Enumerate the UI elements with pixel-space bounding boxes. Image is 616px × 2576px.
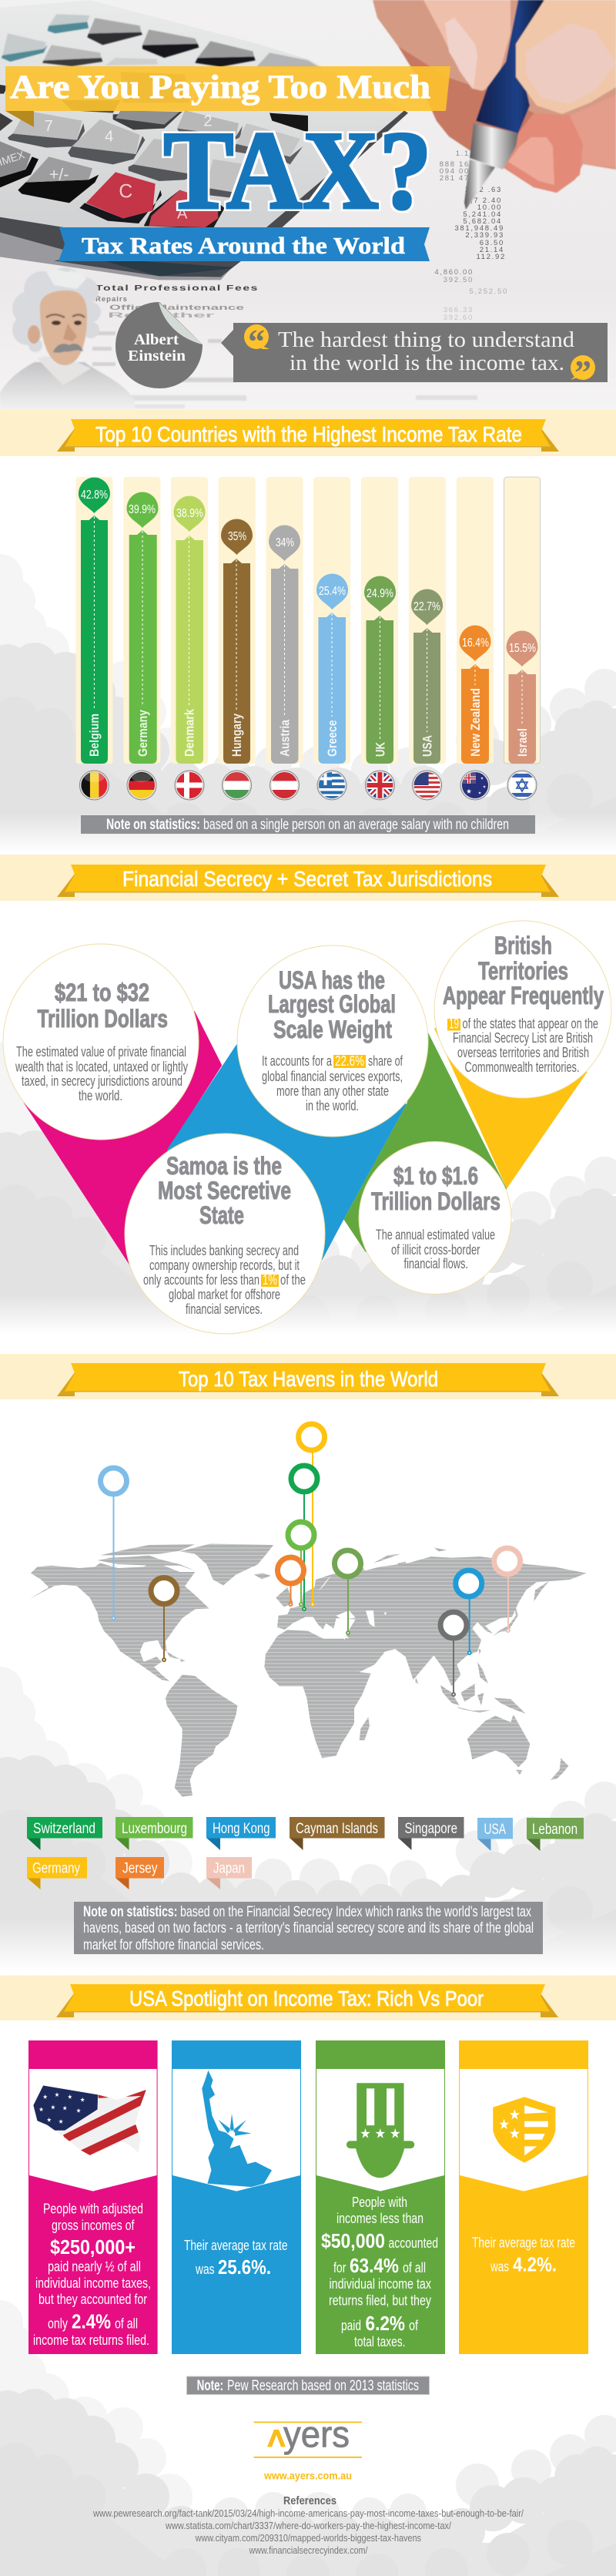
calculator key legends: +/- — [49, 165, 69, 183]
bar: Austria 34%: 34% — [276, 536, 294, 549]
bar: Hungary 35% — [219, 477, 256, 764]
logo: Ayers — [254, 2415, 362, 2458]
panel: British territories: British — [494, 932, 552, 959]
background clouds: footer section — [0, 2300, 616, 2576]
references: www.pewresearch.org/fact-tank/2015/03/24/high-income-americans-pay-most-income-taxes-but-enough-to-be-fair/ — [92, 2508, 524, 2519]
icon: closing quote — [571, 354, 595, 391]
tag: Japan: Japan — [213, 1860, 245, 1877]
paper figures: 392.60 — [444, 314, 474, 322]
panel: high income average tax rate: Their average tax rate — [184, 2238, 288, 2253]
panel: $21 to $32 trillion: Trillion Dollars — [37, 1005, 168, 1033]
bar: Denmark 38.9%: 38.9% — [176, 507, 203, 520]
panel: USA largest global scale weight: share of — [368, 1053, 403, 1069]
tag: Germany: Germany — [32, 1860, 80, 1877]
bar: Belgium 42.8%: 42.8% — [81, 489, 108, 502]
panel: USA largest global scale weight: more than any other state — [276, 1083, 389, 1099]
tag: Luxembourg — [116, 1817, 192, 1850]
panel: low income average tax rate: was — [490, 2259, 509, 2275]
quote box: The hardest thing to understand — [278, 327, 575, 352]
bar: New Zealand 16.4%: 16.4% — [462, 636, 489, 650]
bar: USA 22.7% — [409, 477, 446, 764]
paper figures: 21.14 — [480, 246, 504, 254]
panel: high income people: of all — [115, 2316, 138, 2332]
panel: high income people: People with adjusted — [43, 2201, 143, 2216]
section band: tax havens — [0, 1354, 616, 1399]
bar: USA 22.7%: 22.7% — [413, 600, 440, 613]
panel: Samoa most secretive state: 1% — [263, 1272, 277, 1288]
bar: New Zealand 16.4% — [457, 477, 494, 764]
references: References — [283, 2494, 336, 2507]
panel: Samoa most secretive state: only accounts for less than — [143, 1272, 259, 1288]
subtitle ribbon: Tax Rates Around the World — [82, 232, 405, 259]
coloured connectors — [24, 1011, 588, 1271]
pin: Switzerland — [291, 1466, 317, 1610]
section band: top 10 countries — [0, 410, 616, 456]
paper figures — [85, 149, 508, 408]
map: Africa, Eurasia and Oceania — [254, 1545, 587, 1780]
bar: Israel 15.5%: 15.5% — [509, 642, 536, 655]
map: Americas and Greenland — [29, 1543, 293, 1797]
panel: low income people: of all — [403, 2260, 426, 2275]
tag: USA: USA — [484, 1822, 506, 1838]
bar: Israel 15.5% — [504, 477, 541, 764]
tag: Singapore — [398, 1817, 464, 1850]
pin: Cayman Islands — [151, 1578, 177, 1661]
paper figures: 1.1 — [456, 149, 470, 158]
bar: Israel 15.5%: Israel — [516, 728, 530, 757]
bar: Greece 25.4%: 25.4% — [319, 585, 346, 598]
pin: Singapore — [440, 1612, 467, 1696]
calculator key legends: 7 — [45, 118, 53, 135]
panel: $1 to $1.6 trillion: The annual estimated value — [376, 1227, 495, 1242]
panel: low income people: People with — [352, 2195, 407, 2210]
panel: Samoa most secretive state: global market for offshore — [169, 1287, 280, 1302]
header photo: calculator, hand and tax paper — [0, 0, 616, 410]
tag: Singapore: Singapore — [405, 1821, 457, 1837]
icon: opening quote: “ — [248, 323, 265, 361]
bar: UK 24.9% — [361, 477, 398, 764]
logo: Ayers: yers — [283, 2415, 350, 2455]
panel: low income people: incomes less than — [336, 2211, 424, 2226]
title banner: Are You Paying Too Much — [10, 69, 430, 106]
bar: UK 24.9%: 24.9% — [367, 587, 393, 600]
bar: Germany 39.9%: 39.9% — [129, 503, 156, 516]
paper figures: 112.92 — [476, 253, 506, 261]
panel: low income people: paid — [341, 2318, 361, 2333]
speech circle: Albert Einstein: Albert — [134, 331, 179, 348]
bar: Belgium 42.8% — [75, 477, 112, 764]
quote box — [221, 323, 608, 391]
panel: $1 to $1.6 trillion: Trillion Dollars — [371, 1187, 500, 1215]
tag: Luxembourg: Luxembourg — [122, 1821, 187, 1837]
panel: British territories: 19 — [449, 1016, 459, 1031]
panel: USA largest global scale weight — [237, 945, 428, 1137]
flag: Hungary — [222, 771, 251, 800]
icon: opening quote — [244, 323, 270, 361]
map legend — [27, 1817, 584, 1889]
bar: Denmark 38.9%: Denmark — [183, 708, 197, 757]
TAX? headline: TAX? — [163, 108, 432, 233]
panel: $1 to $1.6 trillion: of illicit cross-border — [391, 1242, 480, 1258]
paper figures: Rep Other — [108, 311, 215, 320]
far keys — [2, 14, 321, 68]
bar: Belgium 42.8%: Belgium — [88, 714, 102, 757]
section band: USA spotlight: USA Spotlight on Income Tax: Rich Vs Poor — [129, 1987, 484, 2010]
bar: UK 24.9%: UK — [373, 742, 387, 757]
paper figures: 392.50 — [444, 276, 474, 284]
title banner — [5, 66, 450, 127]
calculator key legends: 2 — [203, 113, 213, 129]
note: Pew research: Note: — [197, 2378, 223, 2394]
bar: Germany 39.9%: Germany — [136, 709, 150, 757]
subtitle ribbon — [59, 227, 430, 261]
note: chart statistics: Note on statistics: — [106, 817, 200, 833]
panel: Samoa most secretive state: company ownership records, but it — [149, 1258, 300, 1273]
references — [92, 2494, 524, 2556]
paper figures: 5,252.50 — [469, 287, 508, 296]
section band: tax havens: Top 10 Tax Havens in the World — [179, 1367, 438, 1391]
flag: Austria — [270, 771, 299, 800]
tag: Hong Kong: Hong Kong — [213, 1821, 270, 1837]
icon: Statue of Liberty — [202, 2071, 272, 2187]
note: chart statistics: based on a single person on an average salary with no children — [203, 817, 509, 833]
panel: high income average tax rate — [172, 2040, 301, 2354]
panel: $21 to $32 trillion: the world. — [79, 1088, 122, 1103]
panel: high income average tax rate: was — [195, 2262, 214, 2277]
flag: USA — [413, 771, 442, 800]
note: tax haven statistics — [74, 1902, 543, 1954]
panel: USA largest global scale weight: 22.6% — [335, 1053, 364, 1069]
pin: Luxembourg — [288, 1522, 314, 1606]
paper figures: 10.00 — [477, 203, 502, 212]
panel: high income people — [28, 2040, 158, 2354]
tag: Germany — [27, 1857, 87, 1889]
illustration: Albert Einstein — [0, 267, 135, 410]
tag: Switzerland: Switzerland — [33, 1821, 95, 1837]
bar: Austria 34%: Austria — [279, 719, 293, 757]
quote box: in the world is the income tax. — [290, 351, 564, 375]
references: www.cityam.com/209310/mapped-worlds-biggest-tax-havens — [195, 2533, 421, 2544]
panel: $21 to $32 trillion: taxed, in secrecy jurisdictions around — [22, 1073, 182, 1089]
speech circle: Albert Einstein: Einstein — [128, 348, 186, 364]
flag: Belgium — [79, 771, 109, 800]
near keys — [0, 72, 308, 229]
pin: Jersey — [277, 1557, 303, 1606]
panel: $1 to $1.6 trillion — [359, 1142, 511, 1295]
panel: low income people: returns filed, but they — [329, 2293, 431, 2309]
panel: low income people — [316, 2040, 445, 2354]
tag: Hong Kong — [206, 1817, 276, 1850]
panel: low income people: for — [333, 2260, 346, 2275]
panel: Samoa most secretive state: of the — [280, 1272, 306, 1288]
paper figures: 4,860.00 — [434, 268, 474, 277]
panel: low income people: total taxes. — [354, 2334, 405, 2349]
panel: low income people: $50,000 — [321, 2229, 385, 2252]
panel: high income people: only — [48, 2316, 68, 2332]
background clouds: map section — [0, 1667, 616, 2025]
pin: Japan — [494, 1548, 521, 1632]
paper figures: 24,2 .63 — [465, 186, 502, 194]
tag: Jersey — [116, 1857, 164, 1889]
diagram: linked pins and circles — [3, 921, 611, 1334]
flag: UK — [365, 771, 394, 800]
bar: Hungary 35%: 35% — [228, 530, 246, 543]
panel: USA largest global scale weight: USA has the — [279, 966, 385, 994]
icon: USA flag map — [32, 2084, 147, 2158]
paper figures: 1,7 2.40 — [465, 196, 502, 205]
panel: USA largest global scale weight: Largest Global — [268, 990, 396, 1018]
panel: $1 to $1.6 trillion: $1 to $1.6 — [393, 1162, 478, 1190]
calculator key legends: C — [119, 182, 132, 203]
world map — [29, 1543, 587, 1797]
background clouds: secrecy section — [0, 1042, 616, 1396]
note: tax haven statistics: market for offshore financial services. — [83, 1937, 264, 1953]
bar chart: income tax rate by country — [75, 477, 541, 764]
paper figures: Repairs — [95, 295, 128, 304]
pin: Lebanon — [334, 1550, 360, 1634]
panel: high income people: $250,000+ — [50, 2235, 136, 2259]
panel: high income people: individual income taxes, — [35, 2275, 151, 2291]
tag: Switzerland — [27, 1817, 102, 1850]
panel: Samoa most secretive state — [125, 1134, 325, 1334]
panel: Samoa most secretive state: This includes banking secrecy and — [149, 1243, 299, 1258]
pin: Hong Kong — [456, 1570, 482, 1654]
flag: New Zealand — [460, 771, 490, 800]
speech circle: Albert Einstein — [116, 302, 203, 388]
panel: low income people: accounted — [388, 2235, 438, 2251]
bar: Greece 25.4%: Greece — [326, 720, 340, 757]
panel: Samoa most secretive state: financial services. — [186, 1301, 263, 1317]
paper figures: 63.50 — [480, 239, 504, 247]
note: tax haven statistics: Note on statistics: — [83, 1904, 177, 1920]
panel: USA largest global scale weight: global financial services exports, — [262, 1069, 403, 1084]
paper figures: Office Maintenance — [109, 304, 244, 312]
tag: Jersey: Jersey — [122, 1860, 158, 1877]
icon: Uncle Sam hat — [346, 2083, 414, 2178]
panel: low income people: 63.4% — [350, 2254, 399, 2277]
panel: British territories: Territories — [478, 957, 568, 985]
bar: Germany 39.9% — [123, 477, 160, 764]
flag: Germany — [127, 771, 156, 800]
pin: Germany — [299, 1424, 325, 1606]
tag: Cayman Islands — [290, 1817, 385, 1850]
panel: low income average tax rate: 4.2%. — [513, 2253, 557, 2276]
note: Pew research — [186, 2376, 430, 2395]
calculator key legends: 4 — [105, 128, 113, 145]
panel: British territories — [434, 921, 611, 1098]
bar: Hungary 35%: Hungary — [230, 713, 244, 757]
panel: low income average tax rate: Their average tax rate — [472, 2235, 575, 2250]
calculator casing — [0, 0, 408, 280]
paper figures: 366.33 — [444, 306, 474, 314]
panel: high income people: gross incomes of — [52, 2218, 135, 2233]
bar: New Zealand 16.4%: New Zealand — [469, 688, 483, 757]
paper figures: 281 47 — [440, 174, 470, 183]
pin: USA — [100, 1468, 126, 1620]
panel: $21 to $32 trillion — [3, 944, 199, 1140]
panel: USA largest global scale weight: Scale Weight — [273, 1016, 392, 1043]
paper figures: 381,948.49 — [454, 224, 504, 233]
hand holding a pen — [373, 0, 616, 210]
panel: Samoa most secretive state: Most Secretive — [158, 1177, 291, 1204]
panel: Samoa most secretive state: State — [199, 1201, 244, 1229]
paper figures: 5,682.04 — [463, 217, 502, 226]
section band: financial secrecy — [0, 855, 616, 901]
paper figures: 888 16 — [440, 160, 470, 169]
references: www.statista.com/chart/3337/where-do-workers-pay-the-highest-income-tax/ — [165, 2521, 451, 2531]
section band: USA spotlight — [0, 1976, 616, 2020]
paper figures: Total Professional Fees — [95, 284, 259, 293]
calculator — [0, 0, 408, 280]
bar: USA 22.7%: USA — [421, 735, 435, 757]
panel: low income people: individual income tax — [330, 2276, 431, 2292]
flag: Denmark — [175, 771, 204, 800]
tag: Cayman Islands: Cayman Islands — [296, 1821, 378, 1837]
flag row — [79, 771, 537, 800]
panel: $21 to $32 trillion: The estimated value of private financial — [16, 1044, 186, 1060]
tag: Lebanon — [527, 1818, 584, 1851]
paper figures: 094 00 — [440, 167, 470, 176]
panel: high income average tax rate: 25.6%. — [218, 2255, 271, 2279]
paper figures: 5,241.04 — [463, 210, 502, 219]
panel: low income people: 6.2% — [365, 2312, 405, 2335]
bar: Denmark 38.9% — [171, 477, 208, 764]
note: Pew research: Pew Research based on 2013 statistics — [227, 2378, 419, 2394]
references: www.financialsecrecyindex.com/ — [249, 2545, 368, 2556]
flag: Israel — [507, 771, 537, 800]
tag: USA — [477, 1818, 513, 1851]
flag: Greece — [317, 771, 346, 800]
bar: Austria 34% — [266, 477, 303, 764]
panel: low income people: of — [409, 2318, 419, 2333]
panel: high income people: income tax returns filed. — [33, 2333, 149, 2348]
icon: closing quote: ” — [574, 354, 591, 391]
panel: high income people: 2.4% — [72, 2310, 111, 2333]
panel: high income people: but they accounted for — [38, 2292, 147, 2307]
panel: USA largest global scale weight: It accounts for a — [262, 1053, 333, 1069]
bar: Greece 25.4% — [313, 477, 350, 764]
paper figures: 2,339.93 — [465, 231, 504, 240]
map pins — [100, 1424, 521, 1696]
panel: low income average tax rate — [459, 2040, 588, 2354]
panel: Samoa most secretive state: Samoa is the — [166, 1152, 282, 1180]
calculator key legends: A — [177, 205, 188, 222]
calculator key legends — [0, 113, 213, 222]
background clouds: chart section — [0, 554, 616, 907]
icon: stars and stripes shield — [493, 2097, 555, 2163]
tag: Lebanon: Lebanon — [532, 1822, 578, 1838]
section band: financial secrecy: Financial Secrecy + Secret Tax Jurisdictions — [122, 867, 492, 891]
website link: www.ayers.com.au — [263, 2469, 352, 2481]
panel: high income people: paid nearly ½ of all — [48, 2259, 141, 2275]
panel: $21 to $32 trillion: $21 to $32 — [55, 979, 149, 1006]
panel: $1 to $1.6 trillion: financial flows. — [403, 1256, 468, 1271]
tag: Japan — [206, 1857, 252, 1889]
note: chart statistics — [81, 815, 535, 834]
panel: USA largest global scale weight: in the world. — [306, 1098, 359, 1113]
panel: $21 to $32 trillion: wealth that is located, untaxed or lightly — [15, 1059, 188, 1074]
section band: top 10 countries: Top 10 Countries with the Highest Income Tax Rate — [95, 422, 522, 446]
